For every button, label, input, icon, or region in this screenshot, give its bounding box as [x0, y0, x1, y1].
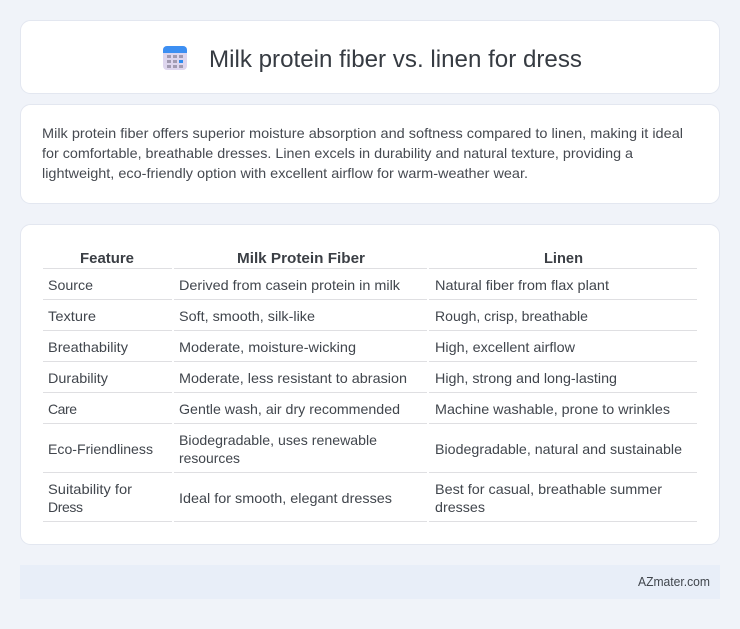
panel: title card: [20, 20, 720, 94]
title: Milk protein fiber vs. linen for dress: [209, 46, 582, 73]
text block: summary: Milk protein fiber offers superior moisture absorption and softness compared to linen, making it ideal: [42, 125, 683, 141]
table row: texture: [48, 308, 588, 324]
table header row: [80, 250, 583, 267]
table row: suitability for dress: dresses: [435, 499, 485, 515]
text block: summary: for comfortable, breathable dresses. Linen excels in durability and natural texture, providing a: [42, 145, 633, 161]
table row: eco-friendliness: Biodegradable, uses renewable: [179, 432, 377, 448]
panel: comparison table: [20, 224, 720, 544]
table row: breathability: High, excellent airflow: [435, 339, 576, 355]
table row: eco-friendliness: Biodegradable, natural and sustainable: [435, 441, 682, 457]
table row: care: Gentle wash, air dry recommended: [179, 401, 400, 417]
table row: suitability for dress: [48, 481, 662, 515]
table row: breathability: Breathability: [48, 339, 128, 355]
table row: eco-friendliness: resources: [179, 450, 240, 466]
table row: source: [48, 277, 609, 293]
table row: suitability for dress: Dress: [48, 499, 83, 515]
table header row: Milk Protein Fiber: [237, 250, 365, 267]
table row: durability: Durability: [48, 370, 108, 386]
table row: source: Derived from casein protein in milk: [179, 277, 401, 293]
table row: source: Natural fiber from flax plant: [435, 277, 609, 293]
icon: calendar: [163, 46, 187, 70]
table row: texture: Texture: [48, 308, 96, 324]
footer bar: [20, 565, 720, 599]
table row: care: Care: [48, 401, 77, 417]
table row: source: Source: [48, 277, 93, 293]
table row: texture: Soft, smooth, silk-like: [179, 308, 315, 324]
table row: suitability for dress: Suitability for: [48, 481, 132, 497]
table row: texture: Rough, crisp, breathable: [435, 308, 588, 324]
table row: eco-friendliness: Eco-Friendliness: [48, 441, 153, 457]
table row: care: Machine washable, prone to wrinkles: [435, 401, 670, 417]
panel: introduction: [20, 104, 720, 204]
table header row: Feature: [80, 250, 134, 267]
table row: suitability for dress: Best for casual, breathable summer: [435, 481, 662, 497]
table row: breathability: [48, 339, 576, 355]
text block: summary: [42, 125, 683, 181]
table row: eco-friendliness: [48, 432, 682, 466]
table row: care: [48, 401, 670, 417]
table row: suitability for dress: Ideal for smooth, elegant dresses: [179, 490, 392, 506]
table row: durability: Moderate, less resistant to abrasion: [179, 370, 407, 386]
footer source label: AZmater.com: [638, 575, 710, 589]
table row: durability: High, strong and long-lasting: [435, 370, 617, 386]
table row: breathability: Moderate, moisture-wicking: [179, 339, 356, 355]
table row: durability: [48, 370, 617, 386]
table header row: Linen: [544, 250, 583, 267]
text block: summary: lightweight, eco-friendly option with excellent airflow for warm-weather wear.: [42, 165, 528, 181]
